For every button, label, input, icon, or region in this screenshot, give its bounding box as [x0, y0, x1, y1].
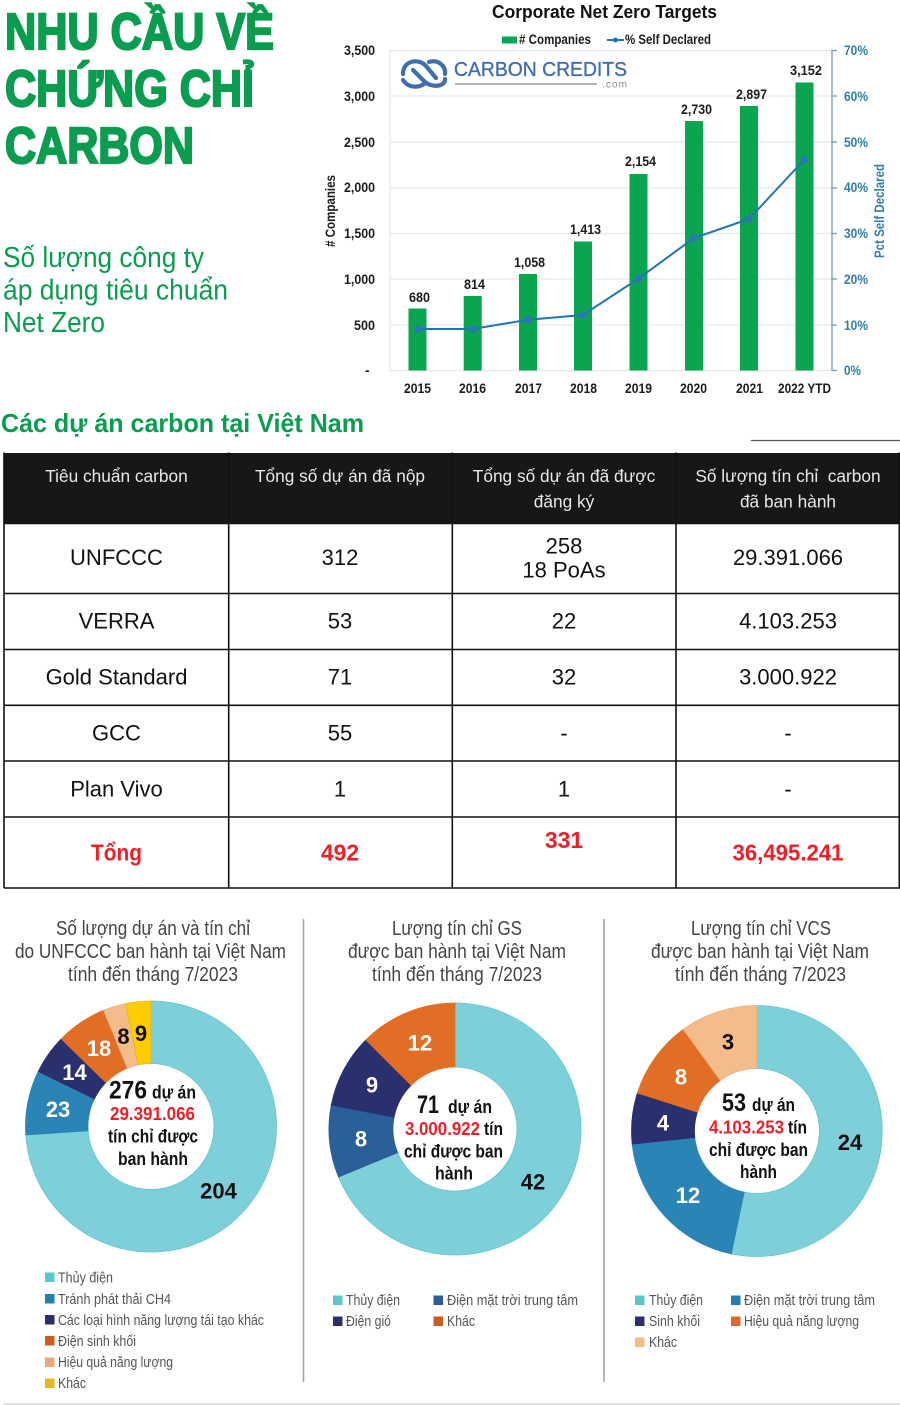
x axis labels: 2016: [459, 381, 486, 396]
donut 1 legend: Khác: [58, 1375, 86, 1392]
logo: carbon credits: [403, 59, 627, 90]
row: Gold Standard: Gold Standard: [46, 664, 187, 690]
row: Plan Vivo: [70, 776, 792, 802]
right axis labels: 50%: [844, 135, 868, 150]
bar value labels: 2,897: [736, 87, 767, 102]
donut 3 legend: [635, 1292, 875, 1351]
left axis labels: 2,000: [344, 180, 375, 195]
bar value labels: 2,154: [625, 154, 656, 169]
x axis labels: [404, 381, 831, 396]
row: Plan Vivo: 1: [334, 776, 346, 802]
donut 2 legend: [333, 1292, 578, 1330]
donut 1 heading: tính đến tháng 7/2023: [68, 964, 238, 986]
donut 1 legend: Thủy điện: [58, 1270, 113, 1286]
row: GCC: -: [784, 720, 792, 746]
x axis labels: 2022 YTD: [778, 381, 831, 396]
donut 1 slices: [26, 1001, 277, 1252]
table header: Số lượng tín chỉ carbon: [695, 466, 881, 486]
right axis labels: 20%: [844, 272, 868, 287]
left axis labels: 500: [354, 318, 375, 333]
x axis labels: 2020: [680, 381, 707, 396]
left axis labels: 3,000: [344, 89, 375, 104]
donut 3 centre text: hành: [740, 1162, 777, 1182]
donut 3 centre text: tín: [788, 1118, 807, 1138]
subtitle: Số lượng công ty: [3, 242, 204, 274]
panel: VCS donut: [632, 918, 882, 1351]
donut 3 centre text: dự án: [752, 1095, 795, 1115]
donut 1 centre text: 276: [109, 1076, 147, 1104]
donut 3 heading: [651, 918, 869, 986]
donut 2 centre text: chỉ được ban: [404, 1142, 503, 1162]
table: carbon projects in Vietnam: [4, 452, 900, 888]
donut 2 values: 9: [366, 1072, 378, 1098]
donut 3 legend: Khác: [649, 1334, 677, 1351]
donut 2 centre text: hành: [435, 1164, 473, 1184]
left axis labels: 3,500: [344, 43, 375, 58]
donut 1 centre text: ban hành: [118, 1149, 188, 1169]
donut 2 heading: Lượng tín chỉ GS: [392, 918, 522, 940]
donut 1 legend: [45, 1270, 264, 1392]
bar value labels: 1,413: [570, 222, 601, 237]
bar value labels: 3,152: [790, 63, 822, 78]
donut 3 heading: tính đến tháng 7/2023: [675, 964, 846, 986]
title: NHU CẦU VỀ: [5, 2, 274, 60]
donut 2 values: 42: [521, 1170, 545, 1194]
bar value labels: 680: [409, 290, 430, 305]
right axis labels: 60%: [844, 89, 868, 104]
row: UNFCCC: 18 PoAs: [522, 558, 606, 582]
donut 3 centre text: chỉ được ban: [709, 1140, 808, 1160]
row: VERRA: 22: [552, 608, 576, 634]
row: VERRA: VERRA: [79, 608, 155, 634]
donut 1 heading: [15, 918, 286, 986]
title: CHỨNG CHỈ: [5, 59, 254, 117]
row: UNFCCC: 312: [322, 545, 358, 570]
donut 1 centre text: [108, 1076, 198, 1169]
logo: carbon credits: CARBON CREDITS: [454, 59, 627, 81]
title: [5, 2, 274, 174]
donut 3 centre text: 4.103.253: [709, 1118, 784, 1138]
row: GCC: GCC: [92, 720, 141, 746]
donut 2 values: 12: [408, 1030, 432, 1056]
x axis labels: 2015: [404, 381, 431, 396]
row: VERRA: [79, 608, 837, 634]
right axis labels: 40%: [844, 180, 868, 195]
subtitle: [3, 242, 228, 339]
bars: number of companies: [408, 82, 814, 370]
donut 1 centre text: tín chỉ được: [108, 1126, 198, 1146]
chart legend: % Self Declared: [625, 32, 711, 47]
donut 1 centre text: 29.391.066: [110, 1104, 195, 1124]
donut 1 values: 23: [46, 1097, 70, 1122]
right axis title: Pct Self Declared: [872, 164, 887, 258]
panel: GS donut: [329, 918, 581, 1330]
donut 3 values: [657, 1030, 863, 1208]
left axis labels: 1,500: [344, 226, 375, 241]
donut 3 legend: Sinh khối: [649, 1313, 700, 1330]
donut 3 legend: Thủy điện: [649, 1292, 703, 1309]
row: VERRA: 4.103.253: [739, 608, 837, 634]
row: total: 331: [545, 827, 583, 853]
donut 2 centre text: [404, 1091, 503, 1184]
plot grid: [390, 50, 832, 371]
row: Plan Vivo: -: [784, 776, 792, 802]
donut 3 values: 3: [722, 1030, 734, 1054]
donut 2 legend: Khác: [447, 1313, 475, 1330]
bar value labels: 814: [464, 277, 485, 292]
row: GCC: -: [560, 720, 568, 746]
donut 1 values: 204: [200, 1178, 238, 1204]
row: UNFCCC: UNFCCC: [70, 545, 163, 570]
right axis labels: 30%: [844, 226, 868, 241]
table header: đăng ký: [534, 492, 595, 512]
donut 2 heading: tính đến tháng 7/2023: [372, 964, 542, 986]
donut 2 centre text: dự án: [448, 1097, 492, 1117]
row: total: 492: [321, 840, 359, 866]
donut 3 values: 24: [838, 1130, 863, 1155]
left axis labels: 2,500: [344, 135, 375, 150]
donut 2 legend: Điện mặt trời trung tâm: [447, 1292, 578, 1309]
right axis labels: 0%: [844, 363, 861, 378]
row: UNFCCC: 258: [546, 534, 582, 558]
donut 3 heading: được ban hành tại Việt Nam: [651, 941, 869, 963]
row: GCC: [92, 720, 792, 746]
chart title: Corporate Net Zero Targets: [492, 1, 717, 22]
row: total: Tổng: [91, 840, 142, 866]
bar value labels: 1,058: [514, 255, 545, 270]
left axis title: # Companies: [323, 175, 338, 247]
donut 3 values: 12: [676, 1183, 700, 1208]
table header: Tiêu chuẩn carbon: [45, 466, 188, 486]
left axis labels: -: [365, 363, 370, 378]
donut 2 values: [355, 1030, 545, 1194]
row: Gold Standard: 32: [552, 664, 576, 690]
donut 1 values: 18: [87, 1036, 111, 1061]
row: Plan Vivo: Plan Vivo: [70, 776, 163, 802]
table header: Tổng số dự án đã nộp: [255, 466, 425, 486]
line: percent self declared: [414, 156, 808, 333]
donut 1 values: 9: [135, 1021, 147, 1046]
row: VERRA: 53: [328, 608, 352, 634]
donut 1 legend: Các loại hình năng lượng tái tạo khác: [58, 1312, 264, 1329]
chart legend: # Companies: [519, 32, 591, 47]
donut 2 values: 8: [355, 1126, 367, 1152]
donut 3 slices: [632, 1006, 882, 1256]
donut 1 legend: Hiệu quả năng lượng: [58, 1354, 173, 1371]
row: Gold Standard: 3.000.922: [739, 664, 837, 690]
donut 3 centre text: [709, 1089, 808, 1182]
donut 1 centre text: dự án: [152, 1082, 196, 1102]
row: Gold Standard: [46, 664, 837, 690]
donut 2 heading: [348, 918, 566, 986]
x axis labels: 2018: [570, 381, 597, 396]
right axis labels: 10%: [844, 318, 868, 333]
table header: [4, 453, 900, 524]
donut 1 heading: Số lượng dự án và tín chỉ: [56, 918, 250, 940]
right axis labels: 70%: [844, 43, 868, 58]
donut 2 centre text: 3.000.922: [405, 1119, 480, 1139]
donut 2 legend: Thủy điện: [346, 1292, 400, 1309]
donut 2 slices: [329, 1003, 581, 1255]
table header: đã ban hành: [740, 492, 836, 512]
donut 3 values: 8: [675, 1064, 687, 1090]
row: total: [91, 827, 844, 866]
donut 1 values: [46, 1021, 238, 1204]
donut 2 centre text: 71: [417, 1091, 439, 1119]
donut 1 legend: Tránh phát thải CH4: [58, 1291, 171, 1308]
chart: corporate net zero targets: [323, 1, 887, 396]
row: UNFCCC: 29.391.066: [733, 545, 843, 570]
right axis labels: [844, 43, 868, 378]
title: CARBON: [5, 117, 194, 174]
donut 3 values: 4: [657, 1110, 670, 1136]
x axis labels: 2021: [736, 381, 763, 396]
donut 3 legend: Điện mặt trời trung tâm: [744, 1292, 875, 1309]
subtitle: áp dụng tiêu chuẩn: [3, 274, 228, 306]
donut 2 centre text: tín: [484, 1119, 503, 1139]
donut 1 heading: do UNFCCC ban hành tại Việt Nam: [15, 941, 286, 963]
left axis labels: 1,000: [344, 272, 375, 287]
row: GCC: 55: [328, 720, 352, 746]
donut 1 legend: Điện sinh khối: [58, 1333, 136, 1350]
bar value labels: [409, 63, 822, 305]
donut 2 heading: được ban hành tại Việt Nam: [348, 941, 566, 963]
donut 3 legend: Hiệu quả năng lượng: [744, 1313, 859, 1330]
row: UNFCCC: [70, 534, 843, 582]
right axis: [832, 50, 837, 371]
row: total: 36,495.241: [732, 840, 844, 866]
x axis labels: 2019: [625, 381, 652, 396]
donut 1 values: 14: [62, 1060, 87, 1085]
table header: Tổng số dự án đã được: [473, 466, 656, 486]
row: Plan Vivo: 1: [558, 776, 570, 802]
bar value labels: 2,730: [681, 102, 712, 117]
donut 1 values: 8: [117, 1024, 130, 1049]
donut 3 centre text: 53: [722, 1089, 746, 1117]
subtitle: Net Zero: [3, 307, 105, 339]
logo: carbon credits: .com: [602, 80, 627, 90]
donut 2 legend: Điện gió: [346, 1313, 391, 1330]
chart legend: [502, 32, 711, 47]
panel: UNFCCC donut: [15, 918, 286, 1392]
x axis labels: 2017: [515, 381, 542, 396]
donut 3 heading: Lượng tín chỉ VCS: [691, 918, 831, 940]
left axis labels: [344, 43, 375, 378]
section heading: Các dự án carbon tại Việt Nam: [1, 408, 364, 438]
row: Gold Standard: 71: [328, 664, 352, 690]
